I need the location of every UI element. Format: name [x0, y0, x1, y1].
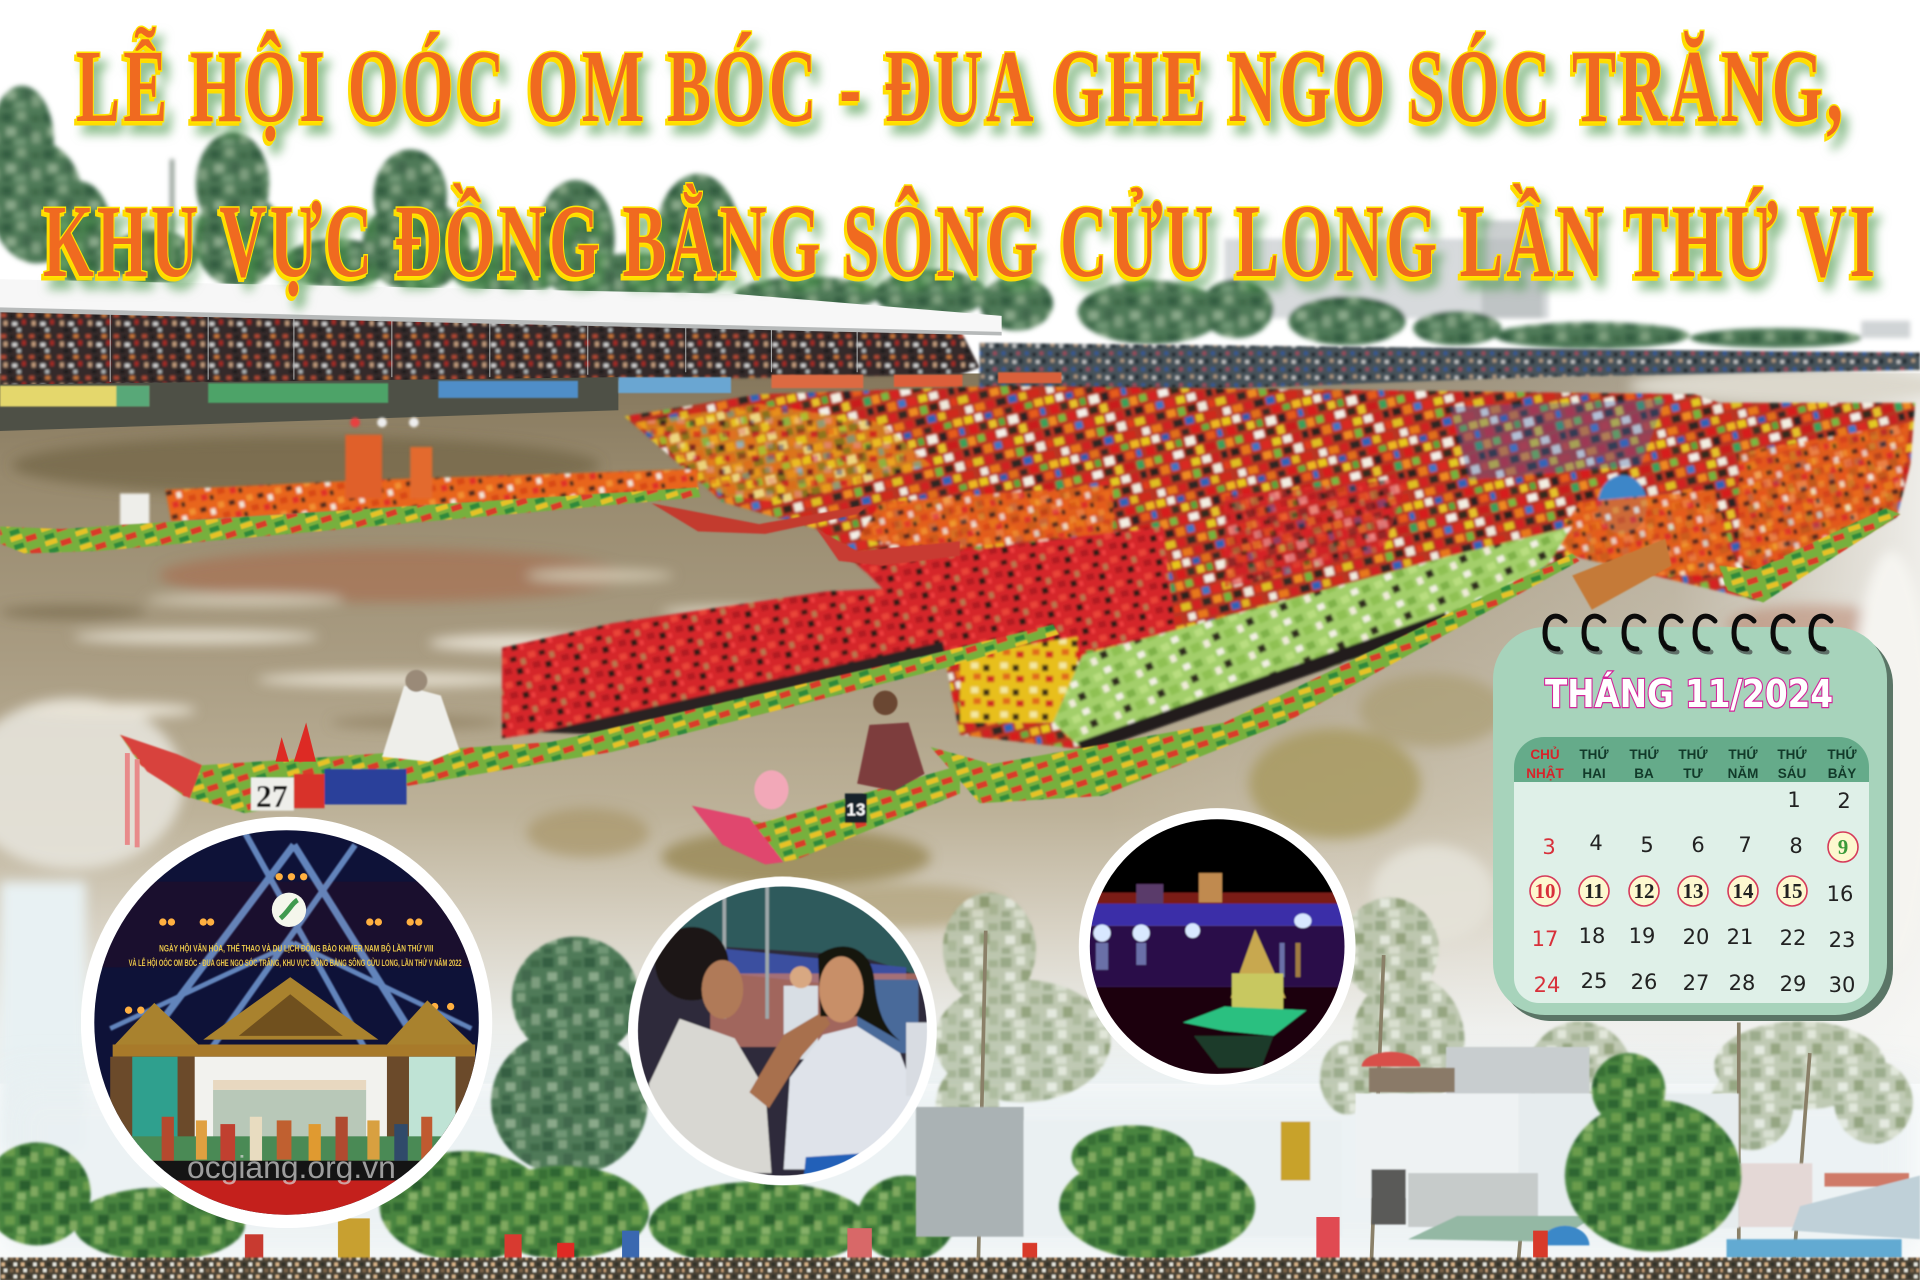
festival banners and flags	[245, 1217, 1548, 1266]
weekday header: TƯ	[1683, 766, 1704, 781]
event logo	[272, 893, 306, 927]
festival day highlights	[1530, 832, 1858, 906]
calendar title: THÁNG 11/2024	[1545, 672, 1833, 716]
watermark: ocgiang.org.vn	[187, 1149, 396, 1185]
banner text on stage: VÀ LỄ HỘI OÓC OM BÓC - ĐUA GHE NGO SÓC TRĂNG, KHU VỰC ĐỒNG BẰNG SÔNG CỬU LONG, LẦN THỨ V NĂM 2022	[129, 957, 462, 968]
dates: 28	[1729, 971, 1755, 995]
weekday header: SÁU	[1778, 766, 1806, 781]
weekday header	[1526, 747, 1857, 781]
dates: 5	[1640, 833, 1654, 857]
weekday header: THỨ	[1579, 747, 1609, 762]
grandstand with roof	[0, 279, 1062, 431]
stage screens	[110, 1057, 475, 1164]
boat number 27	[251, 769, 407, 814]
weekday header: NĂM	[1728, 766, 1758, 781]
distant trees and buildings	[0, 86, 1910, 349]
boat number 27: 27	[256, 779, 288, 814]
helmsmen on bows	[382, 670, 924, 791]
title	[43, 27, 1878, 299]
dates: 13	[1682, 879, 1704, 903]
photo circle: night river light show	[1079, 808, 1356, 1085]
weekday header: THỨ	[1629, 747, 1659, 762]
dates	[1532, 788, 1855, 997]
dates: 15	[1782, 879, 1802, 903]
dates: 1	[1787, 788, 1801, 812]
weekday header: CHỦ	[1530, 747, 1560, 762]
dates: 24	[1534, 973, 1560, 997]
boat number 13	[845, 793, 867, 823]
woman in lace blouse	[649, 927, 830, 1173]
boat hulls	[0, 487, 1900, 864]
dates: 22	[1780, 926, 1806, 950]
dates: 4	[1589, 831, 1603, 855]
dates: 17	[1532, 927, 1558, 951]
dates: 21	[1727, 925, 1753, 949]
spiral binding	[1545, 616, 1831, 652]
dates: 2	[1837, 789, 1851, 813]
pale background for lower area	[0, 1078, 1920, 1261]
dates: 29	[1780, 972, 1806, 996]
boat number 13: 13	[846, 800, 865, 820]
dates: 9	[1838, 835, 1848, 859]
dates: 30	[1829, 973, 1855, 997]
dates: 3	[1542, 835, 1556, 859]
dates: 20	[1683, 925, 1709, 949]
banner text on stage	[129, 942, 462, 968]
dates: 26	[1631, 970, 1657, 994]
golden gables	[113, 977, 475, 1057]
front crowd	[0, 1258, 1920, 1280]
weekday header: BA	[1634, 766, 1654, 781]
weekday header: THỨ	[1678, 747, 1708, 762]
photo circle: stage performance	[81, 817, 492, 1228]
far bank crowd	[980, 343, 1920, 398]
calendar November 2024	[1493, 616, 1893, 1021]
weekday header: NHẬT	[1526, 766, 1564, 781]
river water	[0, 369, 1920, 1151]
dates: 12	[1634, 879, 1654, 903]
riverside buildings	[916, 1047, 1920, 1258]
dates: 23	[1829, 928, 1855, 952]
girl in white shirt	[784, 946, 937, 1182]
crowd on racing boats	[120, 386, 1915, 754]
dark leafy tree	[1059, 1053, 1741, 1260]
weekday header: THỨ	[1777, 747, 1807, 762]
dancers	[162, 1117, 432, 1161]
dates: 19	[1629, 924, 1655, 948]
bow flags	[125, 722, 316, 847]
photo circle: feeding oóc om bóc rice	[628, 877, 937, 1185]
dates: 7	[1738, 833, 1752, 857]
weekday header: THỨ	[1728, 747, 1758, 762]
foreground trees	[0, 893, 1913, 1267]
weekday header: BẢY	[1828, 766, 1856, 781]
dates: 18	[1579, 924, 1605, 948]
weekday header: THỨ	[1827, 747, 1857, 762]
dates: 16	[1827, 882, 1853, 906]
illuminated temple float	[1183, 929, 1307, 1068]
dates: 8	[1789, 834, 1803, 858]
dates: 11	[1584, 879, 1604, 903]
dates: 6	[1691, 833, 1705, 857]
weekday header: HAI	[1582, 766, 1606, 781]
dates: 10	[1534, 879, 1556, 903]
dates: 14	[1732, 879, 1754, 903]
date grid panel	[1514, 737, 1869, 1003]
dates: 27	[1683, 971, 1709, 995]
dates: 25	[1581, 969, 1607, 993]
banner text on stage: NGÀY HỘI VĂN HÓA, THỂ THAO VÀ DU LỊCH ĐỒNG BÀO KHMER NAM BỘ LẦN THỨ VIII	[159, 942, 433, 953]
